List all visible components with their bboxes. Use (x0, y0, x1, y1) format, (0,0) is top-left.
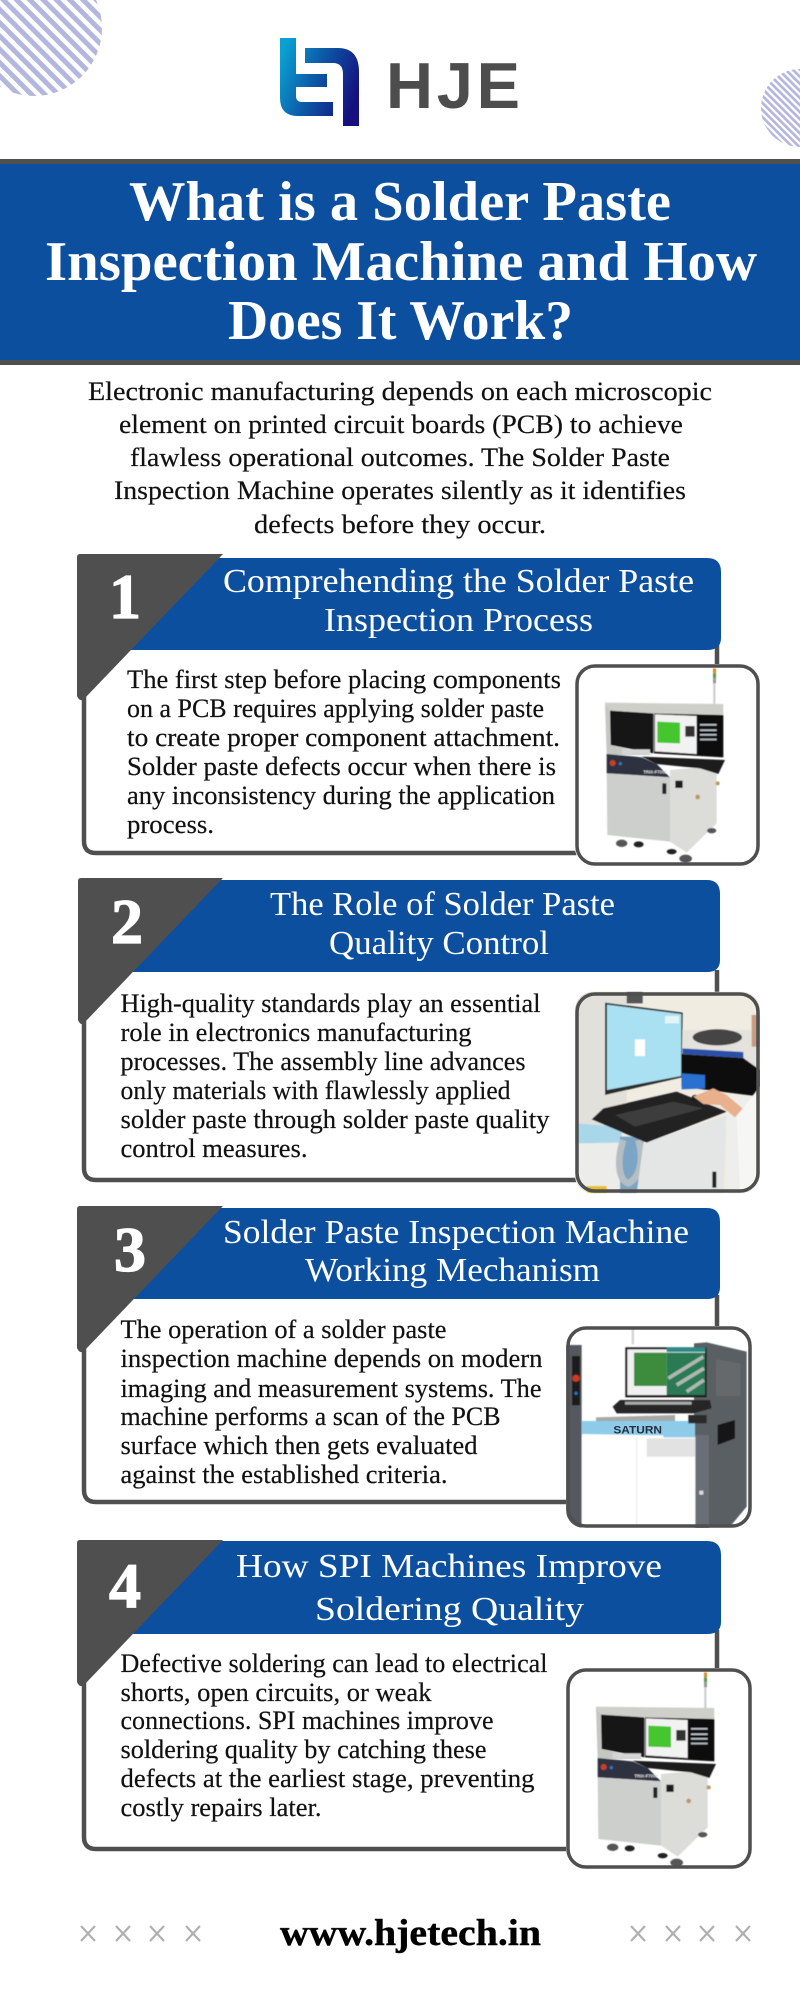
heading bar (120, 1208, 720, 1299)
heading bar (120, 880, 720, 972)
intro paragraph: Inspection Machine operates silently as it identifies (114, 475, 686, 505)
number tab (78, 878, 223, 1024)
body text: machine performs a scan of the PCB (120, 1401, 500, 1431)
body text: connections. SPI machines improve (120, 1705, 494, 1735)
body text: The first step before placing components (127, 664, 561, 694)
image frame (577, 666, 758, 864)
body text: shorts, open circuits, or weak (120, 1677, 432, 1707)
panel: step 3 (77, 1206, 752, 1528)
title banner (0, 159, 800, 365)
intro paragraph: flawless operational outcomes. The Solder Paste (130, 442, 670, 472)
panel: step 4 (77, 1540, 751, 1870)
logo wordmark: HJE (386, 49, 520, 122)
body text (120, 1648, 548, 1822)
body text: solder paste through solder paste quality (120, 1104, 550, 1134)
panel: step 2 (78, 878, 760, 1193)
body text: imaging and measurement systems. The (120, 1373, 542, 1403)
icon: crosses left (81, 1926, 200, 1941)
number 4: 4 (109, 1550, 141, 1621)
card outline (84, 970, 717, 1180)
number tab (77, 554, 223, 700)
body text: Defective soldering can lead to electrical (120, 1648, 548, 1678)
body text: control measures. (120, 1133, 308, 1163)
intro paragraph: element on printed circuit boards (PCB) to achieve (119, 409, 683, 439)
heading (223, 1214, 689, 1289)
number 3: 3 (114, 1214, 146, 1285)
title: Does It Work? (228, 290, 573, 352)
title (45, 171, 758, 352)
body text (127, 664, 561, 839)
heading: Comprehending the Solder Paste (223, 563, 694, 600)
image frame (568, 1670, 750, 1867)
image: SPI machine: TRIX-F700E (634, 1773, 658, 1778)
number tab (77, 1540, 223, 1686)
heading: Soldering Quality (315, 1591, 584, 1628)
image: Saturn inspection machine: SATURN (613, 1424, 662, 1436)
image frame (568, 1328, 750, 1526)
panel: step 1 (77, 554, 760, 866)
number 2: 2 (111, 886, 143, 957)
body text (120, 988, 550, 1163)
body text: on a PCB requires applying solder paste (127, 693, 544, 723)
intro paragraph: defects before they occur. (254, 509, 546, 539)
body text: High-quality standards play an essential (120, 988, 540, 1018)
heading: Quality Control (329, 925, 549, 962)
heading bar (120, 558, 721, 650)
heading: Inspection Process (324, 602, 593, 639)
card outline (84, 1630, 717, 1849)
heading (223, 563, 694, 639)
body text: costly repairs later. (120, 1792, 322, 1822)
body text: role in electronics manufacturing (120, 1017, 471, 1047)
heading: Solder Paste Inspection Machine (223, 1214, 689, 1251)
body text: to create proper component attachment. (127, 722, 560, 752)
intro paragraph: Electronic manufacturing depends on each microscopic (88, 376, 712, 406)
body text: process. (127, 809, 214, 839)
body text: Solder paste defects occur when there is (127, 751, 556, 781)
heading (270, 886, 615, 962)
logo: HJE (280, 38, 520, 126)
card outline (84, 1295, 717, 1502)
footer (81, 1913, 750, 1954)
heading: How SPI Machines Improve (236, 1548, 662, 1585)
body text: The operation of a solder paste (120, 1314, 446, 1344)
number tab (77, 1206, 223, 1352)
heading: The Role of Solder Paste (270, 886, 615, 923)
icon: crosses right (631, 1926, 750, 1941)
decorative striped circle top left (0, 0, 102, 96)
body text: against the established criteria. (120, 1459, 448, 1489)
heading bar (120, 1541, 721, 1634)
body text: inspection machine depends on modern (120, 1343, 542, 1373)
image: Saturn inspection machine (566, 1326, 752, 1528)
title: Inspection Machine and How (45, 231, 758, 293)
body text: soldering quality by catching these (120, 1734, 486, 1764)
intro paragraph (88, 376, 712, 539)
title: What is a Solder Paste (129, 171, 671, 233)
number 1: 1 (109, 561, 141, 632)
heading: Working Mechanism (305, 1252, 600, 1289)
body text: any inconsistency during the application (127, 780, 555, 810)
image: operator at inspection machine (575, 992, 760, 1193)
heading (236, 1548, 662, 1628)
icon: logo mark (280, 38, 359, 126)
website url: www.hjetech.in (280, 1913, 541, 1954)
body text (120, 1314, 542, 1489)
image: SPI machine (575, 664, 760, 866)
image: SPI machine: TRIX-F700E (643, 769, 667, 774)
body text: processes. The assembly line advances (120, 1046, 526, 1076)
body text: surface which then gets evaluated (120, 1430, 478, 1460)
decorative striped circle top right (761, 69, 800, 147)
body text: defects at the earliest stage, preventing (120, 1763, 534, 1793)
image frame (577, 994, 758, 1191)
body text: only materials with flawlessly applied (120, 1075, 510, 1105)
image: SPI machine (566, 1668, 751, 1870)
card outline (84, 645, 717, 853)
